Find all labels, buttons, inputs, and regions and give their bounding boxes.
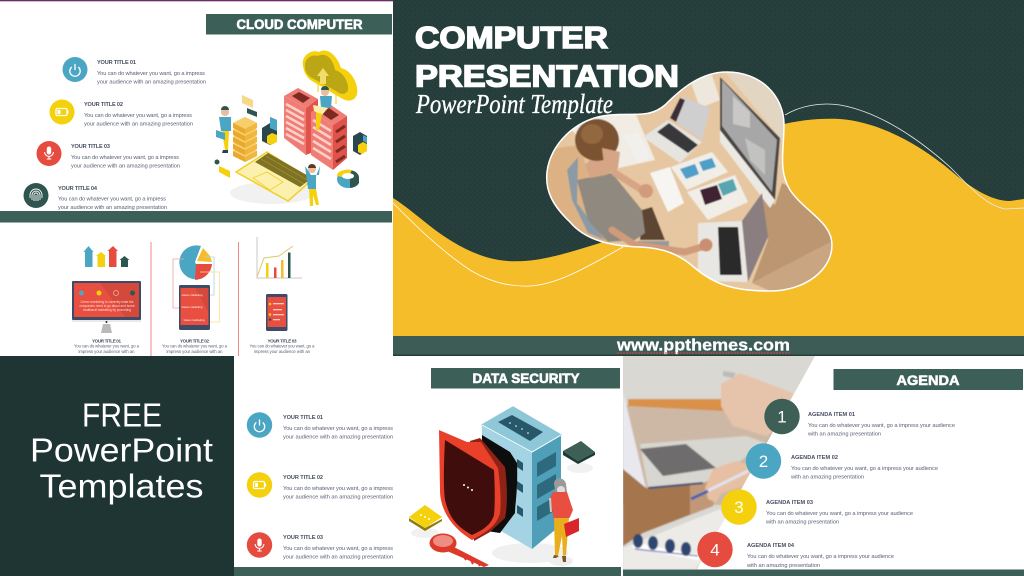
item: agenda 03: AGENDA ITEM 03: [766, 500, 813, 506]
icon: black shield back: [480, 435, 517, 533]
panel: cloud computer slide: [0, 0, 393, 223]
list: cloud computer items: You can do whatever you want, go a impress: [58, 196, 166, 202]
heading bar: agenda: [834, 369, 1023, 390]
title: computer presentation: COMPUTER: [415, 20, 608, 55]
heading bar: data security: [431, 368, 620, 388]
icon: desktop monitor: traditional marketing by promoting: [83, 308, 131, 312]
list: cloud computer items: your audience with an amazing presentation: [58, 205, 167, 211]
icon: gold storage stack: [233, 117, 257, 162]
item: agenda 04: You can do whatever you want, go a impress your audience: [747, 554, 894, 560]
list: cloud computer items: your audience with an amazing presentation: [71, 164, 180, 170]
caption: title 01: You can do whatever you want, go a: [74, 344, 140, 348]
floor right: [752, 183, 835, 283]
list: data security items: You can do whatever you want, go a impress: [283, 426, 393, 432]
floor left: [548, 146, 608, 242]
list: cloud computer items: [24, 57, 206, 211]
icon: tablet: Green marketing: [184, 318, 205, 322]
footer bar: cloud computer: [0, 211, 392, 222]
list: data security items: YOUR TITLE 01: [283, 415, 323, 421]
figure: person at laptop: [305, 164, 320, 206]
item: agenda 03: You can do whatever you want, go a impress your audience: [766, 511, 913, 517]
panel: free templates label: [0, 356, 234, 576]
panel: data security slide: [234, 356, 622, 576]
caption: title 02: impress your audience with an: [166, 349, 223, 354]
list: data security items: [247, 412, 393, 560]
photo: man working at desk: [540, 68, 840, 295]
top laptop: [643, 120, 702, 163]
figure: person with folder: [216, 106, 231, 153]
caption: title 03: [250, 338, 315, 354]
list: data security items: your audience with an amazing presentation: [283, 434, 393, 440]
icon: tablet: Green marketing: [182, 293, 203, 297]
icon: yellow cloud: [303, 50, 357, 104]
footer bar: data security: [234, 567, 621, 576]
icon: blue server: [482, 407, 561, 549]
list: data security items: your audience with an amazing presentation: [283, 554, 393, 560]
caption: title 03: impress your audience with an: [254, 349, 311, 354]
item: agenda 04: with an amazing presentation: [746, 563, 820, 569]
illustration: shield and server: [409, 407, 595, 567]
icon: red key: [430, 534, 489, 567]
list: data security items: You can do whatever you want, go a impress: [283, 546, 393, 552]
icon: tablet: Green marketing: [182, 305, 203, 309]
illustration: isometric cloud data center: [214, 50, 367, 206]
icon: red server towers: [284, 88, 347, 170]
chart: arrows: [84, 246, 130, 267]
item: agenda 02: You can do whatever you want, go a impress your audience: [791, 466, 938, 472]
caption: title 01: [74, 338, 140, 354]
list: cloud computer items: YOUR TITLE 03: [71, 144, 110, 150]
figure: woman with red folder: [549, 478, 579, 566]
outline: white blob border: [547, 72, 832, 291]
man: [567, 157, 605, 240]
item: agenda 04: 4: [710, 540, 720, 560]
item: agenda 04: [697, 532, 894, 569]
list: data security items: YOUR TITLE 02: [283, 475, 323, 481]
icon: desktop monitor: Green marketing is currently what the: [81, 300, 134, 304]
wall: [726, 72, 784, 142]
icon: donut chart: [337, 170, 359, 188]
footer: website: www.ppthemes.com: [616, 336, 790, 354]
item: agenda 03: [721, 489, 913, 526]
item: agenda 01: [764, 399, 955, 438]
item: agenda 02: AGENDA ITEM 02: [791, 455, 838, 461]
list: cloud computer items: You can do whatever you want, go a impress: [97, 71, 205, 77]
item: agenda 01: AGENDA ITEM 01: [808, 412, 855, 418]
heading bar: cloud computer: CLOUD COMPUTER: [236, 17, 363, 32]
caption: title 03: YOUR TITLE 03: [268, 338, 297, 344]
item: agenda 03: with an amazing presentation: [765, 520, 839, 526]
item: agenda 02: with an amazing presentation: [790, 474, 864, 480]
item: agenda 02: 2: [759, 452, 768, 471]
list: cloud computer items: You can do whatever you want, go a impress: [84, 113, 192, 119]
column: monitor: [72, 246, 141, 354]
item: agenda 01: with an amazing presentation: [807, 432, 881, 438]
heading bar: data security: DATA SECURITY: [472, 371, 580, 386]
panel: device comparison slide: [72, 237, 315, 356]
decorative white curve right: [785, 104, 1024, 209]
book: [671, 152, 728, 190]
bottom laptop: [698, 221, 748, 282]
monitor: [720, 130, 775, 208]
list: data security items: You can do whatever you want, go a impress: [283, 486, 393, 492]
panel: agenda slide: [620, 354, 1024, 576]
icon: small dark server blocks: [262, 117, 367, 155]
list: cloud computer items: YOUR TITLE 01: [97, 60, 136, 66]
icon: yellow tile: [409, 505, 442, 531]
caption: title 02: YOUR TITLE 02: [180, 338, 209, 344]
decorative white curve left: [393, 203, 623, 286]
background: yellow wave: [393, 119, 1024, 336]
icon: laptop: [236, 152, 312, 201]
panel: free templates label: Templates: [40, 468, 204, 504]
item: agenda 01: 1: [777, 408, 787, 426]
photo: hand with pen and laptop: [620, 354, 820, 574]
item: agenda 03: 3: [734, 498, 744, 517]
figure: person sitting on server: [313, 86, 332, 130]
heading bar: cloud computer: [206, 14, 392, 34]
icon: smartphone: [266, 294, 288, 331]
subtitle: powerpoint template: PowerPoint Template: [415, 89, 613, 119]
item: agenda 04: AGENDA ITEM 04: [747, 543, 795, 549]
icon: red shield: [439, 430, 507, 541]
icon: floating notes: [214, 95, 257, 178]
column: tablet: [162, 245, 228, 354]
caption: title 03: You can do whatever you want, go a: [250, 344, 315, 348]
title: computer presentation: [415, 20, 679, 94]
title: computer presentation: PRESENTATION: [415, 58, 679, 94]
panel: hero computer presentation: [393, 0, 1024, 356]
heading bar: agenda: AGENDA: [896, 372, 960, 388]
icon: desktop monitor: [72, 281, 141, 333]
icon: tablet: [179, 285, 210, 330]
column: phone: [250, 237, 315, 354]
chart: pie: [173, 245, 220, 322]
list: data security items: YOUR TITLE 03: [283, 535, 323, 541]
divider lines: [151, 242, 238, 356]
icon: desktop monitor: companies need to go about and boost: [79, 304, 135, 308]
list: cloud computer items: YOUR TITLE 02: [84, 102, 123, 108]
keyboards: [624, 133, 650, 162]
list: cloud computer items: YOUR TITLE 04: [58, 186, 98, 192]
icon: dark green tile: [563, 441, 595, 464]
list: cloud computer items: your audience with an amazing presentation: [97, 80, 206, 86]
caption: title 02: [162, 338, 228, 354]
list: cloud computer items: your audience with an amazing presentation: [84, 122, 193, 128]
item: agenda 01: You can do whatever you want, go a impress your audience: [808, 423, 955, 429]
panel: free templates label: PowerPoint: [30, 432, 213, 468]
panel: free templates label: FREE: [82, 396, 162, 434]
caption: title 01: impress your audience with an: [78, 349, 135, 354]
caption: title 02: You can do whatever you want, go a: [162, 344, 228, 348]
footer bar: agenda: [623, 570, 1024, 576]
footer: website: [393, 336, 1024, 354]
chart: bars and line: [257, 237, 302, 278]
item: agenda 02: [746, 443, 938, 480]
caption: title 01: YOUR TITLE 01: [92, 338, 121, 344]
list: data security items: your audience with an amazing presentation: [283, 494, 393, 500]
list: cloud computer items: You can do whatever you want, go a impress: [71, 155, 179, 161]
